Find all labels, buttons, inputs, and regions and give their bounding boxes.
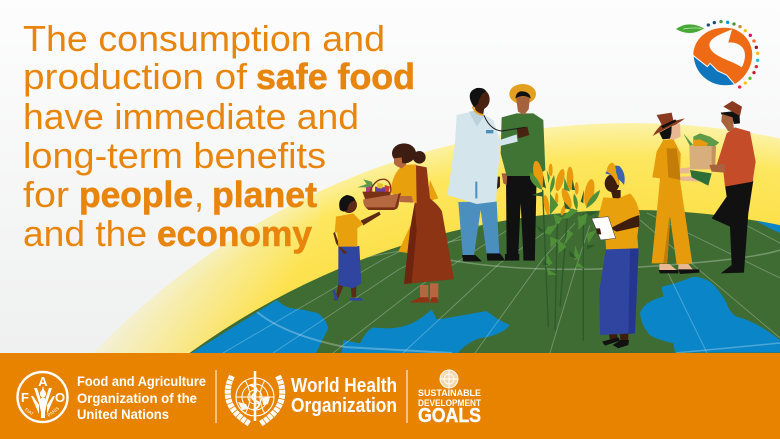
logo: FAO emblem xyxy=(18,372,68,422)
globe grid lines xyxy=(223,213,780,353)
person: woman with clipboard xyxy=(592,163,640,348)
person: woman with basket xyxy=(357,143,454,303)
logo: FAO emblem: A xyxy=(38,374,48,389)
yellow sunrise glow xyxy=(94,123,780,353)
logo: Sustainable Development Goals: GOALS xyxy=(418,405,481,427)
divider xyxy=(216,370,217,423)
green globe xyxy=(190,210,780,353)
logo: Sustainable Development Goals: SUSTAINABLE xyxy=(418,388,481,399)
text: WHO name: Organization xyxy=(291,395,397,417)
clipboard xyxy=(592,217,616,240)
plant: maize stalks xyxy=(530,160,600,341)
title: production of xyxy=(23,56,248,97)
text: WHO name: World Health xyxy=(291,375,397,397)
icon: food safety logo xyxy=(676,20,759,89)
text: FAO name xyxy=(77,373,206,422)
logo: FAO emblem: FIAT xyxy=(24,407,35,417)
logo: FAO emblem: PANIS xyxy=(47,406,60,418)
text: WHO name xyxy=(291,375,397,417)
title: , xyxy=(194,174,204,215)
title: long-term benefits xyxy=(23,135,326,176)
footer band xyxy=(0,353,780,439)
title: for xyxy=(23,174,69,215)
title: The consumption and xyxy=(23,18,385,59)
logo: Sustainable Development Goals: DEVELOPMENT xyxy=(418,398,481,409)
title: and the xyxy=(23,213,147,254)
title: economy xyxy=(157,213,312,254)
person: woman in brown hat with money xyxy=(652,113,699,274)
person: man in fez with groceries xyxy=(683,101,756,273)
grocery bag xyxy=(683,133,725,186)
person: child xyxy=(333,195,381,301)
text: FAO name: United Nations xyxy=(77,406,169,422)
title: safe food xyxy=(256,56,415,97)
logo: FAO emblem: O xyxy=(55,390,65,405)
illustration: globe and sunrise xyxy=(94,123,780,353)
title: have immediate and xyxy=(23,96,359,137)
logo: Sustainable Development Goals xyxy=(418,370,481,427)
logo: FAO emblem: F xyxy=(21,390,29,405)
text: FAO name: Food and Agriculture xyxy=(77,373,206,389)
glow fade on the left xyxy=(94,192,320,353)
title xyxy=(23,18,415,254)
person: man in straw hat xyxy=(501,84,545,261)
text: FAO name: Organization of the xyxy=(77,390,197,406)
title: planet xyxy=(212,174,317,215)
title: people xyxy=(79,174,193,215)
logo: WHO emblem xyxy=(228,371,282,424)
blue water areas xyxy=(192,220,780,353)
basket xyxy=(357,179,413,210)
divider xyxy=(406,370,408,423)
person: doctor with stethoscope xyxy=(447,88,529,261)
